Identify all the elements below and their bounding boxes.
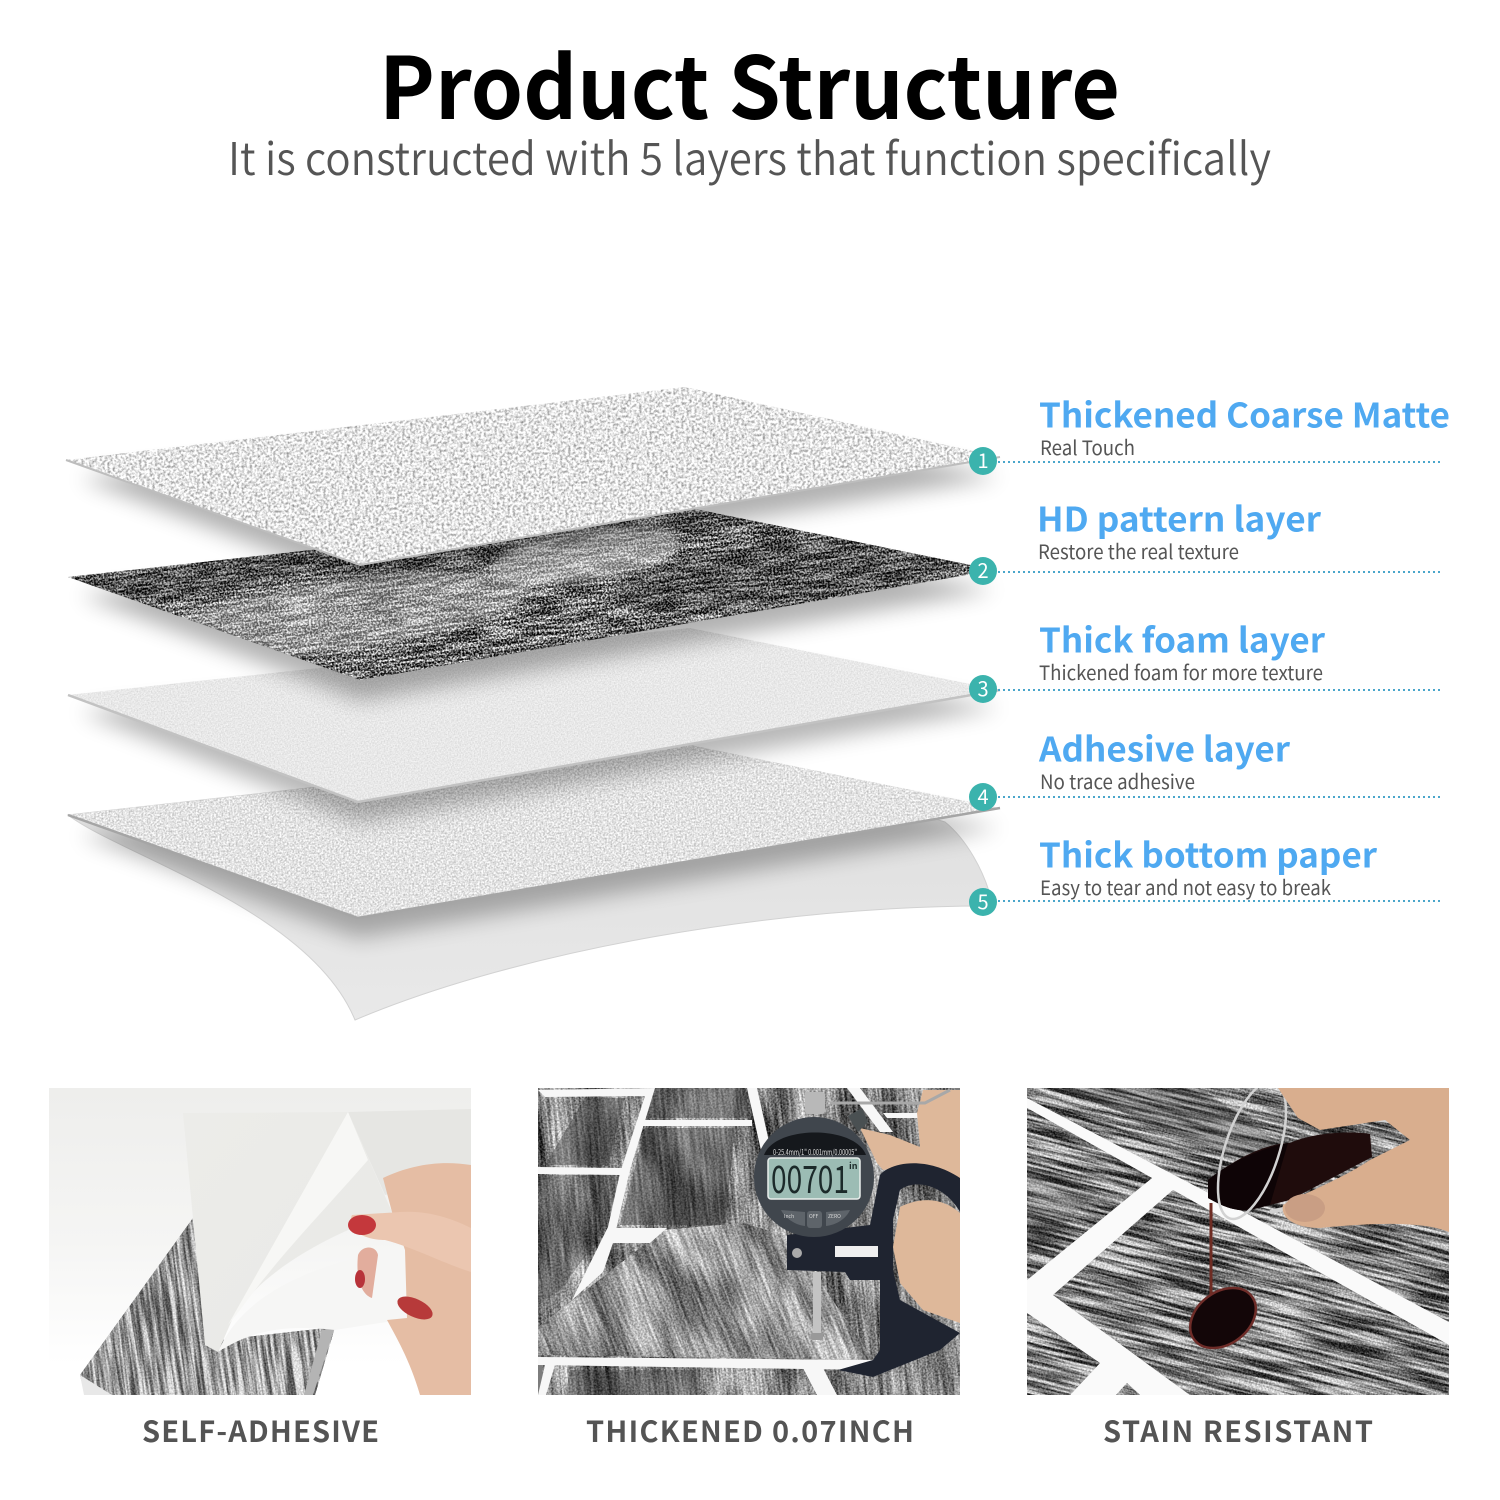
white grout lines xyxy=(538,1088,925,1395)
caption: stain resistant: STAIN RESISTANT xyxy=(1103,1409,1373,1451)
layer 5: curved backing paper xyxy=(68,745,993,1020)
callout 1 xyxy=(969,388,1450,475)
callout 3 xyxy=(969,614,1440,703)
subtitle: It is constructed with 5 layers that function specifically xyxy=(228,123,1271,188)
peeled backing paper xyxy=(218,1327,335,1352)
callout 3: Thick foam layer xyxy=(1039,614,1325,662)
thumbnail xyxy=(1285,1194,1325,1222)
callout 2: 2 xyxy=(977,555,989,584)
wood tile stack xyxy=(80,1218,334,1395)
gauge buttons: ZERO xyxy=(828,1213,841,1220)
callout 4: Adhesive layer xyxy=(1038,722,1290,772)
title: Product Structure xyxy=(379,19,1120,144)
callout 1: 1 xyxy=(977,445,989,474)
callout 5: Thick bottom paper xyxy=(1039,828,1377,878)
callout 5 xyxy=(969,828,1440,916)
caption: self-adhesive: SELF-ADHESIVE xyxy=(142,1409,379,1451)
caption: thickened: THICKENED 0.07INCH xyxy=(586,1409,914,1451)
sheet fold highlight xyxy=(228,1112,368,1325)
callout 1: Real Touch xyxy=(1040,432,1135,461)
dark liquid in cup xyxy=(1208,1133,1372,1210)
callout 5: Easy to tear and not easy to break xyxy=(1040,872,1331,901)
callout 2: HD pattern layer xyxy=(1037,492,1321,542)
callout 3: Thickened foam for more texture xyxy=(1039,657,1323,686)
gauge buttons: Inch xyxy=(784,1213,794,1220)
peeled sheet xyxy=(190,1156,392,1352)
digital thickness gauge: 00701 xyxy=(771,1149,849,1204)
gauge buttons xyxy=(781,1210,850,1228)
callout 4: No trace adhesive xyxy=(1040,766,1195,795)
hand xyxy=(860,1090,960,1182)
callout 2: Restore the real texture xyxy=(1038,536,1239,565)
callout 1: Thickened Coarse Matte xyxy=(1039,388,1450,438)
dark planks xyxy=(545,1098,625,1165)
callout 4 xyxy=(969,722,1440,811)
gauge spindle xyxy=(813,1272,821,1333)
gauge buttons: OFF xyxy=(809,1213,818,1220)
liquid puddle xyxy=(1188,1286,1258,1350)
wood tiles xyxy=(1027,1088,1449,1395)
digital thickness gauge: in xyxy=(849,1159,858,1172)
LCD screen xyxy=(768,1158,860,1199)
callout 2 xyxy=(969,492,1440,585)
photo panel: self-adhesive peel xyxy=(49,1088,471,1395)
backing paper top strip xyxy=(348,1109,471,1195)
photo panel: stain resistant xyxy=(1027,1088,1449,1395)
gripping fingers xyxy=(893,1200,960,1323)
gauge top pin xyxy=(805,1092,825,1114)
layer 1: thickened coarse matte xyxy=(60,380,1005,585)
hand xyxy=(348,1163,471,1395)
gauge frame xyxy=(787,1163,960,1377)
callout 3: 3 xyxy=(977,673,989,702)
callout 4: 4 xyxy=(977,781,989,810)
hand xyxy=(1278,1088,1449,1232)
bent wood sheet xyxy=(538,1223,873,1360)
photo panel: thickness gauge xyxy=(538,1088,960,1395)
digital thickness gauge xyxy=(754,1090,960,1377)
layer diagram xyxy=(66,387,1000,1020)
glass cup xyxy=(1216,1088,1389,1220)
layer 2: HD pattern layer xyxy=(68,509,988,710)
liquid stream xyxy=(1210,1203,1212,1294)
wood texture xyxy=(538,1088,960,1395)
layer 3: thick foam layer xyxy=(60,620,1005,822)
gauge dial xyxy=(754,1117,874,1237)
callout 5: 5 xyxy=(977,886,989,915)
layer 4: adhesive layer xyxy=(60,740,1005,938)
digital thickness gauge: 0-25.4mm/1" 0.001mm/0.00005" xyxy=(773,1147,857,1158)
red nails xyxy=(348,1215,376,1235)
